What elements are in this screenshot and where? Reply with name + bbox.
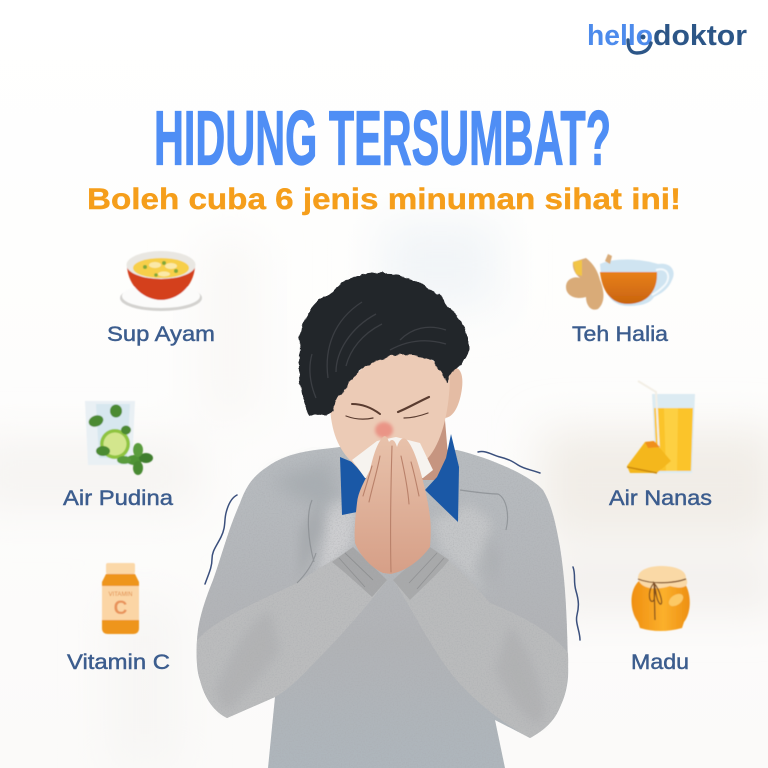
label: Air Pudina — [63, 487, 173, 510]
forearm shading — [215, 610, 280, 712]
collar — [340, 434, 459, 522]
right cuff ribbing — [393, 547, 449, 600]
item: Vitamin C — [67, 563, 170, 674]
person sneezing into tissue — [197, 272, 580, 768]
hair highlights — [310, 302, 446, 398]
torso and upper arms — [197, 447, 568, 768]
chest highlights — [318, 500, 358, 580]
icon: mint water — [85, 401, 153, 475]
icon: vitamin C bottle: C — [114, 598, 128, 619]
item: Madu — [631, 566, 690, 674]
icon: chicken soup bowl — [120, 251, 202, 311]
logo: hellodoktor: doktor — [653, 20, 747, 52]
item: Teh Halia — [566, 254, 674, 346]
hands — [355, 436, 431, 574]
item: Air Pudina — [63, 401, 173, 510]
label: Air Nanas — [609, 487, 712, 510]
sweater — [197, 447, 568, 768]
icon: pineapple juice — [627, 381, 695, 473]
logo: hellodoktor: hello — [587, 20, 653, 52]
icon: vitamin C bottle — [102, 563, 139, 634]
cuff rib lines — [339, 553, 444, 589]
right forearm — [393, 547, 568, 738]
ear — [444, 368, 462, 418]
face — [330, 352, 450, 472]
label: Sup Ayam — [107, 323, 215, 346]
icon: honey jar — [632, 566, 690, 631]
icon: vitamin C bottle: VITAMIN — [109, 592, 132, 598]
squiggle lines — [205, 452, 580, 640]
item: Sup Ayam — [107, 251, 215, 346]
logo: hellodoktor — [587, 20, 747, 53]
label: Madu — [631, 651, 689, 674]
hair — [299, 272, 469, 415]
tissue — [352, 437, 433, 478]
left forearm — [197, 547, 387, 718]
sweater seams — [297, 490, 508, 583]
label: Teh Halia — [572, 323, 668, 346]
label: Vitamin C — [67, 651, 170, 674]
left cuff ribbing — [332, 547, 387, 597]
red nose — [375, 422, 393, 438]
neck — [352, 420, 450, 480]
eyes and brows — [346, 397, 429, 419]
icon: ginger tea — [566, 254, 674, 310]
shoulder shadow — [270, 460, 340, 510]
underarm shadows — [299, 500, 322, 580]
subtitle: Boleh cuba 6 jenis minuman sihat ini! — [87, 183, 681, 216]
item: Air Nanas — [609, 381, 712, 510]
